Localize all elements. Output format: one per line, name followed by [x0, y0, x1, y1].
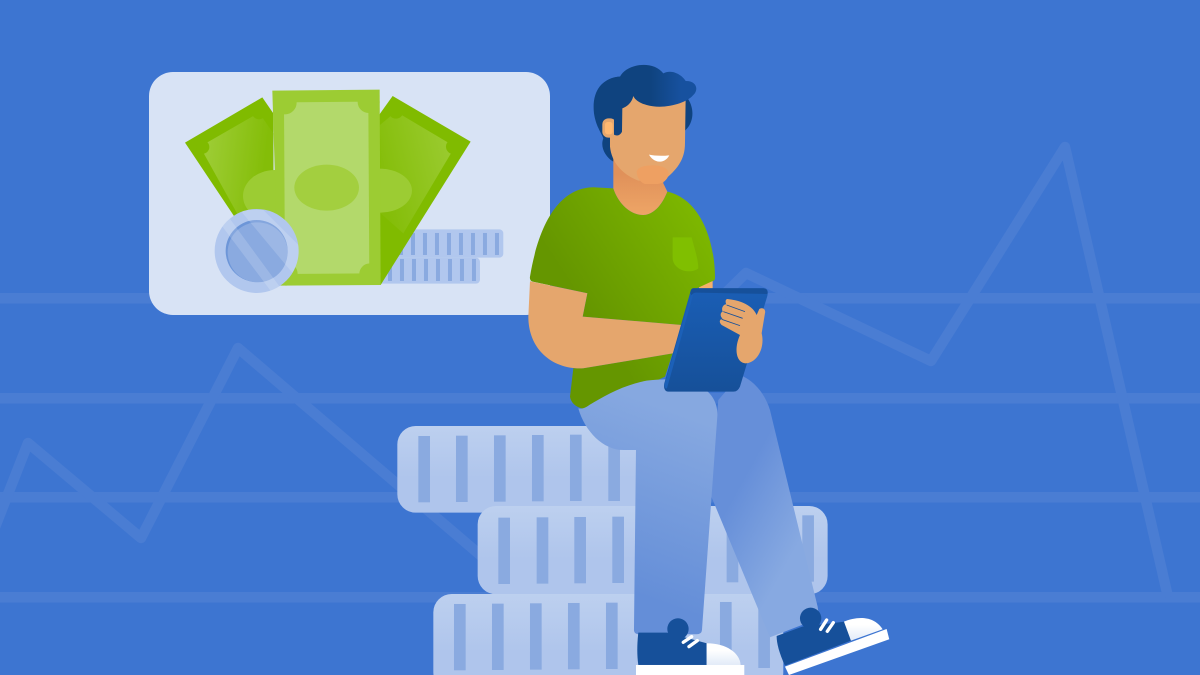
far arm: [699, 281, 713, 291]
front shoe: [636, 618, 744, 675]
hair front: [595, 65, 696, 135]
beard: [637, 165, 669, 184]
icon: banknotes: [185, 90, 471, 297]
person: torso and shirt: [530, 187, 715, 409]
right banknote: [348, 96, 471, 285]
face: [610, 95, 686, 181]
hair back: [594, 77, 692, 162]
arm: [528, 281, 682, 368]
shirt: [530, 187, 715, 409]
coin stack middle: [478, 506, 828, 594]
centre banknote: [272, 90, 381, 286]
back leg: [710, 375, 819, 637]
tablet: [664, 288, 768, 392]
person: head, arm and tablet: [528, 65, 768, 392]
neck: [613, 157, 667, 215]
panel: money card: [149, 72, 550, 315]
left banknote: [185, 97, 307, 285]
person: back leg and shoe: [710, 375, 889, 675]
back shoe: [777, 608, 889, 675]
hand: [720, 299, 765, 363]
shirt pocket: [673, 237, 698, 271]
coin stack top: [397, 426, 651, 513]
coin stacks behind the bills: [357, 229, 503, 284]
front leg: [578, 379, 717, 634]
coin stack bottom: [433, 594, 783, 675]
person: [528, 65, 889, 675]
background chart grid and trend lines: [0, 147, 1200, 602]
smile: [649, 155, 669, 162]
icon: coin: [214, 209, 299, 293]
coin stack: three stacked coins: [397, 426, 828, 675]
person: front leg and shoe: [578, 379, 744, 675]
ear: [602, 118, 616, 138]
